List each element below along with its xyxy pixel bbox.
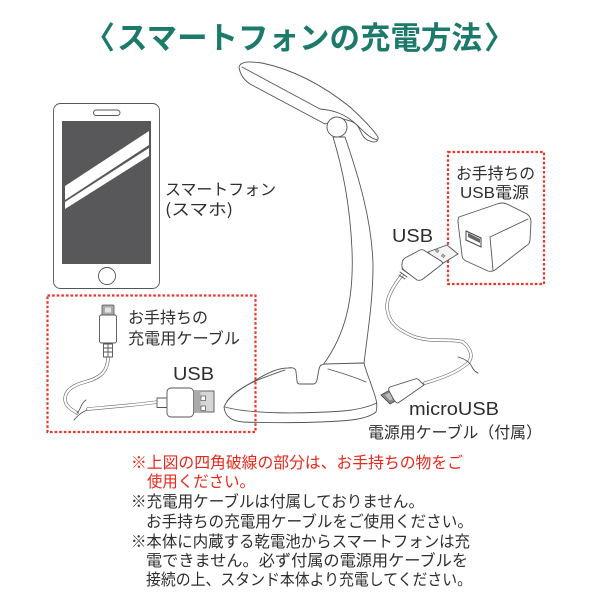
label: charging cable [128, 309, 240, 348]
note: battery charging warning: 接続の上、スタンド本体より充電してください。 [146, 571, 472, 589]
label: charging cable: お手持ちの [128, 309, 208, 327]
lamp neck [323, 137, 373, 365]
note: cable not included: ※充電用ケーブルは付属しておりません。 [131, 492, 424, 511]
note: battery charging warning [131, 533, 472, 589]
label: USB: USB [173, 364, 214, 384]
note: red notice: ※上図の四角破線の部分は、お手持ちの物をご [131, 454, 463, 472]
note: battery charging warning: 電できません。必ず付属の電源用ケーブルを [146, 551, 468, 570]
label: micro USB power cable: 電源用ケーブル（付属） [368, 423, 542, 442]
lamp head [239, 62, 378, 142]
panel: user-supplied USB power source (red dashed box) [448, 152, 544, 284]
note: cable not included: お手持ちの充電用ケーブルをご使用ください。 [146, 512, 473, 531]
note: cable not included [131, 492, 473, 531]
notes [131, 454, 473, 589]
label: USB power source: お手持ちの [456, 165, 535, 183]
icon: smartphone [54, 104, 160, 288]
label: USB: USB [392, 226, 433, 246]
note: battery charging warning: ※本体に内蔵する乾電池からスマートフォンは充 [131, 533, 470, 551]
label: USB power source: USB電源 [460, 184, 529, 202]
note: red notice [131, 454, 463, 491]
label: micro USB power cable [368, 399, 542, 442]
illustration: desk lamp [224, 62, 378, 423]
title: スマートフォンの充電方法 [117, 21, 482, 56]
icon: micro USB cable with USB plug [65, 305, 214, 420]
icon: USB plug [399, 245, 458, 280]
label: smartphone: スマートフォン [165, 182, 276, 199]
label: micro USB power cable: microUSB [409, 399, 499, 419]
label: smartphone [165, 182, 276, 220]
label: smartphone: (スマホ) [165, 196, 233, 220]
note: red notice: 使用ください。 [147, 473, 255, 491]
title: 〈 [84, 21, 115, 56]
label: charging cable: 充電用ケーブル [128, 329, 240, 348]
lamp joint [327, 117, 347, 137]
lamp base [224, 363, 377, 423]
title: 〉 [484, 21, 515, 56]
icon: USB charger [458, 203, 531, 271]
label: USB power source [456, 165, 535, 202]
icon: supplied micro USB power cable [381, 275, 478, 404]
panel: user-supplied charging cable (red dashed box) [48, 296, 256, 432]
